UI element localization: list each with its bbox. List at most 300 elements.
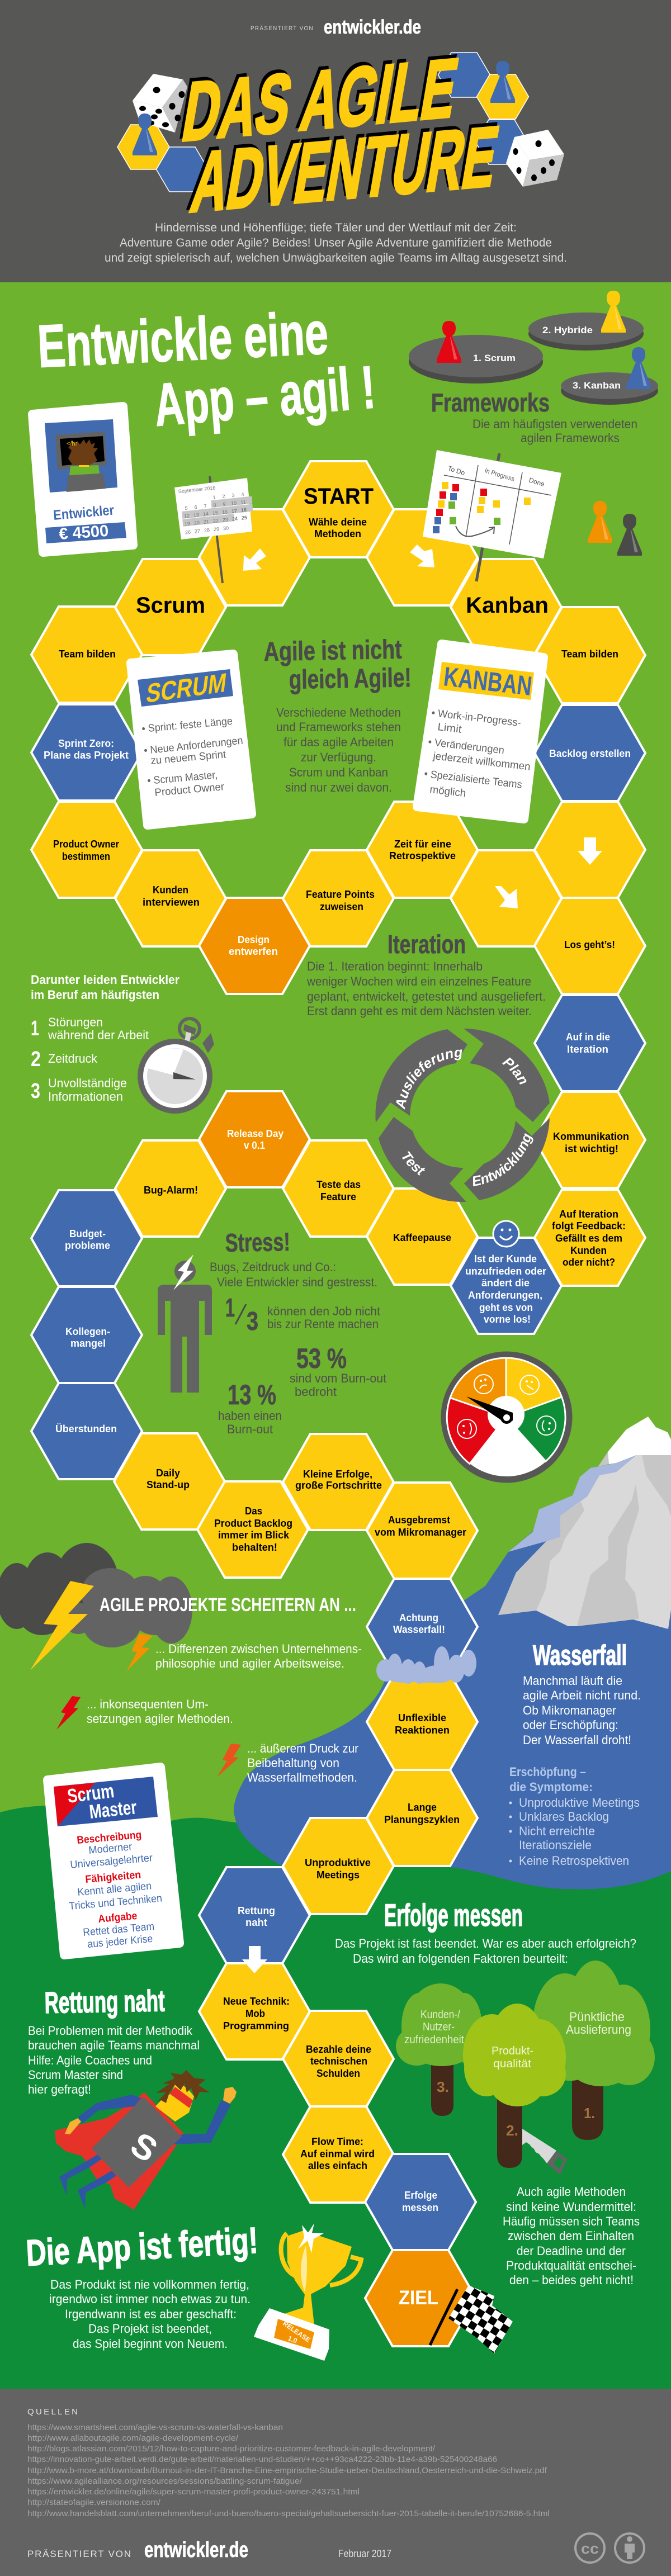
panel: Scrum card: • Scrum Master,: [147, 769, 218, 787]
title shadow: DAS AGILE: [174, 38, 462, 156]
icon: calendar sign: [174, 476, 254, 583]
icon: left die: [133, 74, 187, 132]
hex: ZIEL: ZIEL: [399, 2287, 438, 2309]
hex: Kommunikation: ist wichtig!: [565, 1143, 618, 1154]
text: methods paragraph: Scrum und Kanban: [289, 765, 388, 779]
stat: one third: 1: [225, 1293, 235, 1322]
text: failure reason 2: [87, 1697, 233, 1726]
footer: sources: http://www.allaboutagile.com/agile-development-cycle/: [27, 2433, 239, 2443]
icon: calendar sign: 14: [203, 511, 209, 517]
footer: sources: QUELLEN: [27, 2407, 79, 2417]
hex: Kommunikation: Kommunikation: [553, 1131, 629, 1142]
footer: sources: http://blogs.atlassian.com/2015/12/how-to-capture-and-prioritize-customer-feedback-in-agile-development/: [27, 2444, 436, 2454]
hex: Auf Iteration folgt Feedback: Auf Iteration: [559, 1209, 618, 1220]
podium 3 Kanban: [561, 347, 658, 405]
intro text: Adventure Game oder Agile? Beides! Unser Agile Adventure gamifiziert die Methode: [120, 236, 552, 249]
heading: Rettung naht: Rettung naht: [44, 1984, 165, 2020]
hex: Kollegenmangel: Kollegen-: [65, 1326, 110, 1337]
hex: Backlog erstellen: [535, 705, 645, 801]
hex: arrow diagonal: [451, 850, 561, 946]
panel: Scrum Master card: Tricks und Techniken: [69, 1893, 163, 1912]
hex: Release Day: v 0.1: [244, 1140, 265, 1151]
icon: calendar sign: 1: [212, 494, 216, 500]
panel: Scrum card: zu neuem Sprint: [150, 749, 227, 767]
text: iteration paragraph: geplant, entwickelt, getestet und ausgeliefert.: [307, 989, 546, 1003]
text: finish paragraph: Irgendwann ist es aber geschafft:: [65, 2307, 237, 2321]
character card: Entwickler: € 4500: [58, 522, 109, 543]
hex: START: [283, 461, 394, 557]
panel: Scrum Master card: Beschreibung: [77, 1829, 142, 1846]
tree 3: zufriedenheit: [404, 2034, 464, 2046]
text: methods paragraph: zur Verfügung.: [301, 750, 376, 764]
hex: Product Owner: bestimmen: [62, 851, 110, 862]
panel: Scrum Master card: [48, 1767, 179, 1955]
hex: Design entwerfen: [199, 898, 310, 994]
hex: Retrospektive: Retrospektive: [389, 850, 456, 861]
hex: Unflexible Reaktionen: Unflexible: [398, 1712, 446, 1723]
hex: arrow down: [535, 802, 645, 898]
footer: presented by: PRÄSENTIERT VON: [27, 2549, 133, 2559]
icon: calendar sign: 28: [204, 527, 210, 533]
logo: entwickler.de: entwickler.de: [324, 16, 421, 38]
text: methods paragraph: und Frameworks stehen: [276, 720, 401, 734]
list: developer complaints: [31, 973, 179, 1104]
title artwork: [117, 38, 564, 230]
hex: Rettung naht: Rettung: [238, 1905, 275, 1916]
footer background: [0, 2389, 671, 2576]
hex: Kanban: Kanban: [466, 593, 549, 618]
icon: calendar sign: 12: [184, 513, 190, 519]
footer: sources: https://www.agilealliance.org/resources/sessions/battling-scrum-fatigue/: [27, 2476, 303, 2486]
hex: Kaffeepause: [367, 1188, 478, 1285]
hex: Bezahle Schulden: Schulden: [316, 2068, 360, 2079]
icon: calendar sign: 16: [222, 509, 228, 515]
cloud: light: [63, 1568, 192, 1647]
hex: Product Owner: Product Owner: [53, 839, 119, 850]
icon: calendar sign: 7: [204, 503, 207, 509]
hex: Kunden interviewen: Kunden: [153, 884, 188, 896]
icon: calendar sign: 23: [223, 517, 228, 523]
hex: Kollegenmangel: mangel: [70, 1338, 106, 1349]
hex: arrow right: [367, 509, 478, 605]
hex: Ist der Kunde unzufrieden: ändert die: [481, 1277, 530, 1289]
stat: one third: bis zur Rente machen: [267, 1317, 379, 1331]
icon: saw: [522, 2129, 567, 2175]
hex: Ist der Kunde unzufrieden: vorne los!: [484, 1314, 531, 1325]
hex: Auf Iteration folgt Feedback: Gefällt es dem: [555, 1233, 622, 1244]
hex: Unflexible Reaktionen: [367, 1674, 478, 1770]
footer: presented by: [27, 2538, 248, 2562]
text: failure reason 3: ... äußerem Druck zur: [247, 1741, 358, 1755]
icon: calendar sign: 8: [213, 502, 216, 508]
water: [234, 1509, 671, 1889]
symptoms list: [509, 1796, 640, 1868]
hexagon path continued: [199, 1483, 478, 2346]
text: Rettung paragraph: [28, 2024, 200, 2096]
chart: iteration cycle: Test: [401, 1151, 425, 1176]
hex: Lange Planungszyklen: [367, 1770, 478, 1866]
tree 2: 2.: [506, 2122, 518, 2139]
icon: calendar sign: 25: [242, 515, 247, 521]
icon: stopwatch: [138, 1019, 214, 1114]
hex: Rettung naht: naht: [245, 1917, 267, 1928]
hex: Sprint Zero: Sprint Zero:: [58, 738, 114, 749]
hex: Auf Iteration folgt Feedback: oder nicht?: [563, 1257, 615, 1268]
text: stress intro: Viele Entwickler sind gestresst.: [217, 1275, 377, 1289]
heading: Iteration: Iteration: [388, 930, 466, 959]
tree 1: [533, 1961, 655, 2140]
hex: Auf in die Iteration: Auf in die: [566, 1031, 610, 1043]
character card: Entwickler: Entwickler: [53, 503, 115, 523]
hex: Erfolge messen: messen: [402, 2202, 438, 2213]
icon: trophy: RELEASE: [281, 2319, 312, 2344]
chart: iteration cycle: Auslieferung: [396, 1049, 462, 1110]
panel: Scrum Master card: Rettet das Team: [83, 1921, 155, 1939]
text: Wundermittel paragraph: sind keine Wundermittel:: [506, 2200, 636, 2214]
hex: Auf in die Iteration: [535, 995, 645, 1091]
text: finish paragraph: Das Produkt ist nie vollkommen fertig,: [50, 2277, 249, 2291]
panel: Kanban card: jederzeit willkommen: [432, 750, 531, 773]
frameworks subtitle: agilen Frameworks: [521, 431, 620, 445]
hex: Rettung naht: [199, 1867, 310, 1963]
hex: Kleine Erfolge: Kleine Erfolge,: [303, 1469, 372, 1480]
panel: Kanban card: • Spezialisierte Teams: [423, 768, 523, 791]
stat: 53 percent: 53 %: [296, 1343, 347, 1374]
text: Rettung paragraph: Hilfe: Agile Coaches und: [28, 2053, 152, 2067]
hex: Auf Iteration folgt Feedback: [535, 1190, 645, 1286]
symptoms list: Unproduktive Meetings: [519, 1796, 640, 1810]
icon: smiley: [493, 1221, 519, 1247]
symptoms heading: [509, 1765, 593, 1794]
hex: Kunden interviewen: interviewen: [143, 897, 200, 908]
panel: Wasserfall: Manchmal läuft die: [523, 1674, 622, 1688]
text: Wundermittel paragraph: Produktqualität entschei-: [506, 2258, 636, 2272]
hex: START: START: [304, 484, 374, 509]
presented by line: PRÄSENTIERT VON: [251, 25, 314, 32]
tree 1: Pünktliche: [569, 2010, 625, 2024]
symptoms heading: die Symptome:: [509, 1780, 593, 1794]
hex: Kaffeepause: Kaffeepause: [393, 1232, 451, 1243]
hex: Daily Stand-up: Daily: [156, 1467, 180, 1479]
list: developer complaints: Störungen: [48, 1015, 103, 1029]
icon: red lightning: [56, 1696, 81, 1730]
icon: yellow lightning: [30, 1581, 94, 1670]
footer: sources: http://stateofagile.versionone.com/: [27, 2498, 161, 2507]
symptoms list: Iterationsziele: [519, 1838, 592, 1852]
hex: Ist der Kunde unzufrieden: Ist der Kunde: [474, 1253, 537, 1265]
podium 2 Hybride: [528, 291, 644, 351]
text: Erfolge intro: Das Projekt ist fast beendet. War es aber auch erfolgreich?: [335, 1936, 636, 1950]
icon: calendar sign: 20: [194, 520, 200, 526]
hex: Bezahle Schulden: Bezahle deine: [306, 2044, 371, 2055]
hex: Feature Points: Feature Points: [306, 889, 375, 900]
hex: Product Backlog: behalten!: [232, 1542, 277, 1553]
stat: 13 percent: haben einen: [218, 1409, 282, 1423]
hex: Unflexible Reaktionen: Reaktionen: [395, 1725, 450, 1736]
hex: Product Backlog: Das: [245, 1505, 262, 1517]
list: developer complaints: während der Arbeit: [48, 1028, 149, 1042]
text: finish paragraph: Das Projekt ist beendet,: [88, 2322, 212, 2336]
list: developer complaints: 1: [31, 1017, 39, 1040]
hex: Retrospektive: Zeit für eine: [394, 839, 451, 850]
podium 2 Hybride: 2. Hybride: [542, 325, 593, 335]
panel: Scrum card: • Neue Anforderungen: [143, 735, 244, 757]
icon: calendar sign: 17: [231, 508, 237, 514]
icon: blue pawn left: [133, 113, 157, 155]
panel: Scrum Master card: aus jeder Krise: [87, 1933, 153, 1950]
list: developer complaints: Darunter leiden Entwickler: [31, 973, 179, 987]
hex: Auf Iteration folgt Feedback: Kunden: [570, 1245, 607, 1256]
hex: Bezahle Schulden: [283, 2011, 394, 2107]
heading: Entwickle eine App agil: [36, 299, 378, 439]
hex: Unproduktive Meetings: Meetings: [316, 1869, 360, 1881]
intro text: und zeigt spielerisch auf, welchen Unwägbarkeiten agile Teams im Alltag ausgesetzt sind.: [105, 252, 567, 264]
icon: right die: [506, 130, 564, 187]
list: developer complaints: 3: [31, 1079, 40, 1103]
podium 3 Kanban: 3. Kanban: [573, 380, 621, 391]
hex: Ausgebremst: [367, 1483, 478, 1579]
heading: Erfolge messen: Erfolge messen: [384, 1897, 523, 1933]
frameworks podium: [409, 291, 658, 445]
panel: Scrum Master card: Scrum: [66, 1780, 115, 1807]
hex: Neue Technik: Mob: [245, 2008, 265, 2019]
icon: stressed person: [158, 1254, 212, 1393]
hex: Kanban: [451, 559, 561, 655]
heading: Agile ist nicht gleich Agile: [263, 635, 412, 695]
hex: Product Backlog: immer im Blick: [218, 1530, 290, 1541]
heading: Stress: Stress!: [225, 1227, 290, 1257]
hex: Release Day: [199, 1091, 310, 1187]
icon: checkered flag: [430, 2285, 513, 2354]
hexagons in title: [117, 53, 529, 192]
footer: sources: http://www.handelsblatt.com/unternehmen/beruf-und-buero/buero-special/gehaltsuebersicht-fuer-2015-tabelle-it-berufe/10752686-5.html: [27, 2509, 550, 2518]
hex: Neue Technik: Programming: [223, 2020, 289, 2032]
character card: Entwickler: </hr: [67, 441, 78, 447]
hex: ZIEL: [365, 2250, 476, 2346]
chart: iteration cycle: Entwicklung: [473, 1133, 533, 1186]
text: failure reason 1: [155, 1642, 362, 1670]
hex: Ist der Kunde unzufrieden: geht es von: [479, 1302, 533, 1313]
illustration: superhero Scrum Master: S: [124, 2125, 164, 2170]
footer: sources: https://entwickler.de/online/agile/super-scrum-master-profi-product-owner-243751.html: [27, 2487, 360, 2497]
text: failure reason 1: ... Differenzen zwischen Unternehmens-: [155, 1642, 362, 1656]
hex: Achtung Wasserfall: Wasserfall!: [393, 1624, 445, 1635]
list: developer complaints: Zeitdruck: [48, 1052, 98, 1066]
hex: Kunden interviewen: [115, 850, 226, 946]
hex: Scrum: Scrum: [136, 593, 205, 618]
panel: Scrum card: • Sprint: feste Länge: [141, 716, 233, 735]
text: iteration paragraph: [306, 959, 546, 1018]
icon: small blue cloud: [376, 1646, 476, 1684]
hex: Bug-Alarm: [115, 1140, 226, 1237]
list: developer complaints: Unvollständige: [48, 1076, 127, 1090]
stat: one third: 3: [247, 1306, 258, 1336]
panel: Scrum card: [131, 654, 252, 825]
title text: DAS AGILE: [176, 41, 464, 159]
hex: Budgetprobleme: Budget-: [69, 1228, 106, 1239]
panel: Wasserfall: agile Arbeit nicht rund.: [523, 1688, 641, 1702]
hex: Achtung Wasserfall: Achtung: [399, 1612, 438, 1623]
icon: kanban board sign: In Progress: [484, 466, 516, 483]
hex: Kollegenmangel: [31, 1287, 142, 1383]
hex: START: Wähle deine: [309, 517, 367, 528]
hex: Los gehts: Los geht’s!: [564, 939, 615, 950]
footer: date: Februar 2017: [338, 2548, 391, 2559]
tree 2: qualität: [493, 2058, 531, 2070]
icon: calendar sign: 10: [231, 500, 237, 506]
hex: Ueberstunden: [31, 1383, 142, 1479]
panel: Kanban card: [417, 644, 544, 819]
stat: 13 percent: [218, 1379, 282, 1436]
icon: calendar sign: 15: [212, 510, 218, 516]
hex: Daily Stand-up: Stand-up: [147, 1479, 190, 1490]
text: Rettung paragraph: hier gefragt!: [28, 2082, 91, 2096]
hex: Scrum: [115, 559, 226, 655]
hex: arrow left: [199, 509, 310, 605]
hex: Teste das Feature: Feature: [320, 1191, 356, 1202]
panel: Wasserfall: Der Wasserfall droht!: [523, 1733, 631, 1747]
hexagon path: [31, 461, 645, 1578]
title text: [176, 41, 505, 230]
icon: calendar sign: 5: [185, 505, 188, 511]
text: Wundermittel paragraph: [503, 2185, 640, 2287]
dark green lower landscape: [0, 1806, 671, 2389]
icon: orange pawn: [588, 501, 612, 543]
icon: blue pawn right: [490, 61, 515, 103]
heading: Entwickle eine App agil: Entwickle eine: [36, 299, 330, 380]
icon: calendar sign: 19: [185, 521, 190, 527]
text: Erfolge intro: [335, 1936, 636, 1966]
icon: creative commons: cc: [581, 2540, 599, 2557]
panel: Kanban card: Limit: [437, 721, 462, 736]
hex: Unproduktive Meetings: [283, 1818, 394, 1914]
hex: Team bilden left: Team bilden: [59, 648, 116, 660]
symptoms list: Keine Retrospektiven: [519, 1854, 629, 1868]
hex: Teste das Feature: Teste das: [316, 1179, 361, 1190]
text: failure reason 3: [247, 1741, 358, 1784]
arrow down between hexes: [242, 1946, 267, 1973]
heading: Agile Projekte scheitern: AGILE PROJEKTE SCHEITERN AN ...: [100, 1594, 356, 1616]
hex: Release Day: Release Day: [227, 1128, 283, 1139]
heading: Entwickle eine App agil: App – agil !: [152, 353, 378, 439]
stat: 53 percent: [290, 1343, 386, 1399]
stat: 53 percent: sind vom Burn-out: [290, 1371, 386, 1385]
tree 2: [463, 2004, 566, 2168]
text: methods paragraph: für das agile Arbeiten: [283, 735, 394, 749]
icon: calendar sign: 13: [193, 512, 199, 518]
panel: Scrum card: Product Owner: [154, 781, 225, 799]
icon: calendar sign: 26: [185, 529, 191, 536]
icon: calendar sign: 22: [213, 518, 219, 524]
icon: calendar sign: 2: [222, 494, 225, 499]
panel: Scrum Master card: Master: [88, 1796, 138, 1823]
stat: one third: [225, 1293, 380, 1336]
panel: Scrum Master card: Fähigkeiten: [85, 1869, 141, 1886]
hex: Ist der Kunde unzufrieden: [451, 1238, 561, 1334]
hex: START: Methoden: [314, 528, 361, 539]
hex: Daily Stand-up: [114, 1433, 225, 1530]
hex: Ausgebremst: Ausgebremst: [388, 1514, 450, 1526]
hex: Product Backlog: Product Backlog: [214, 1518, 292, 1529]
hex: Feature Points: zuweisen: [320, 901, 363, 912]
tree 3: [396, 1983, 486, 2116]
tree 2: Produkt-: [492, 2045, 533, 2057]
panel: Kanban card: möglich: [429, 784, 466, 799]
hex: Flow Time: Auf einmal wird: [300, 2148, 375, 2160]
symptoms list: Unklares Backlog: [519, 1810, 609, 1824]
hex: Bezahle Schulden: technischen: [310, 2056, 367, 2067]
hex: Kommunikation: [535, 1092, 645, 1188]
heading: Agile ist nicht gleich Agile: Agile ist nicht: [263, 635, 402, 667]
text: iteration paragraph: Erst dann geht es mit dem Nächsten weiter.: [307, 1004, 532, 1018]
hex: Lange Planungszyklen: Lange: [408, 1802, 437, 1813]
tree 1: 1.: [584, 2105, 595, 2122]
hex: Flow Time: [283, 2106, 394, 2203]
text: iteration paragraph: weniger Wochen wird ein einzelnes Feature: [306, 974, 531, 988]
hex: Unproduktive Meetings: Unproduktive: [305, 1857, 371, 1868]
intro text: [105, 221, 567, 264]
panel: Wasserfall: [509, 1640, 641, 1868]
hex: Ueberstunden: Überstunden: [55, 1423, 117, 1434]
heading: Frameworks: Frameworks: [431, 388, 550, 417]
text: Rettung paragraph: Scrum Master sind: [28, 2068, 123, 2082]
chart: iteration cycle: [375, 1029, 550, 1202]
frameworks subtitle: Die am häufigsten verwendeten: [472, 417, 637, 431]
hex: Auf in die Iteration: Iteration: [567, 1044, 608, 1055]
footer: presented by: entwickler.de: [144, 2538, 248, 2562]
hex: Sprint Zero: Plane das Projekt: [44, 750, 129, 761]
list: developer complaints: im Beruf am häufigsten: [31, 988, 159, 1002]
icon: storm clouds: [0, 1543, 192, 1671]
hex: Flow Time: alles einfach: [308, 2160, 367, 2171]
text: Wundermittel paragraph: Auch agile Methoden: [517, 2185, 626, 2199]
podium 1 Scrum: 1. Scrum: [473, 353, 516, 363]
icon: calendar sign: 24: [232, 516, 238, 522]
icon: gray pawn: [617, 514, 642, 556]
panel: Kanban card: KANBAN: [442, 661, 533, 702]
stat: 13 percent: Burn-out: [227, 1422, 273, 1436]
icon: calendar sign: September 2016: [178, 485, 216, 494]
chart: stress gauge: [441, 1352, 573, 1483]
hex: Neue Technik: Neue Technik:: [223, 1996, 290, 2007]
text: Wundermittel paragraph: Häufig müssen sich Teams: [503, 2214, 640, 2228]
hex: Teste das Feature: [283, 1140, 394, 1237]
text: failure reason 2: ... inkonsequenten Um-: [87, 1697, 209, 1711]
tree 3: Kunden-/: [420, 2009, 460, 2021]
hex: Erfolge messen: Erfolge: [404, 2190, 437, 2201]
hex: Retrospektive: [367, 802, 478, 898]
text: Rettung paragraph: brauchen agile Teams manchmal: [28, 2038, 200, 2052]
hex: Achtung Wasserfall: [367, 1579, 478, 1675]
heading: Agile ist nicht gleich Agile: gleich Agile!: [289, 663, 412, 695]
hex: Product Owner: [31, 802, 142, 898]
illustration: superhero Scrum Master: [55, 2070, 237, 2210]
hex: Budgetprobleme: [31, 1190, 142, 1286]
text: failure reason 3: Wasserfallmethoden.: [247, 1770, 357, 1784]
hex: Design entwerfen: Design: [238, 934, 270, 945]
heading: Die App ist fertig: Die App ist fertig!: [25, 2219, 259, 2274]
hex: Flow Time: Flow Time:: [311, 2136, 363, 2147]
hex: Bug-Alarm: Bug-Alarm!: [144, 1185, 198, 1196]
stat: one third: können den Job nicht: [267, 1304, 380, 1318]
panel: Wasserfall: oder Erschöpfung:: [523, 1718, 618, 1732]
presented by line: [251, 16, 421, 38]
icon: calendar sign: 27: [195, 528, 200, 534]
header background: [0, 0, 671, 282]
icon: creative commons: [575, 2534, 644, 2563]
hex: Ist der Kunde unzufrieden: Anforderungen,: [468, 1290, 542, 1301]
icon: calendar sign: 6: [194, 504, 197, 510]
